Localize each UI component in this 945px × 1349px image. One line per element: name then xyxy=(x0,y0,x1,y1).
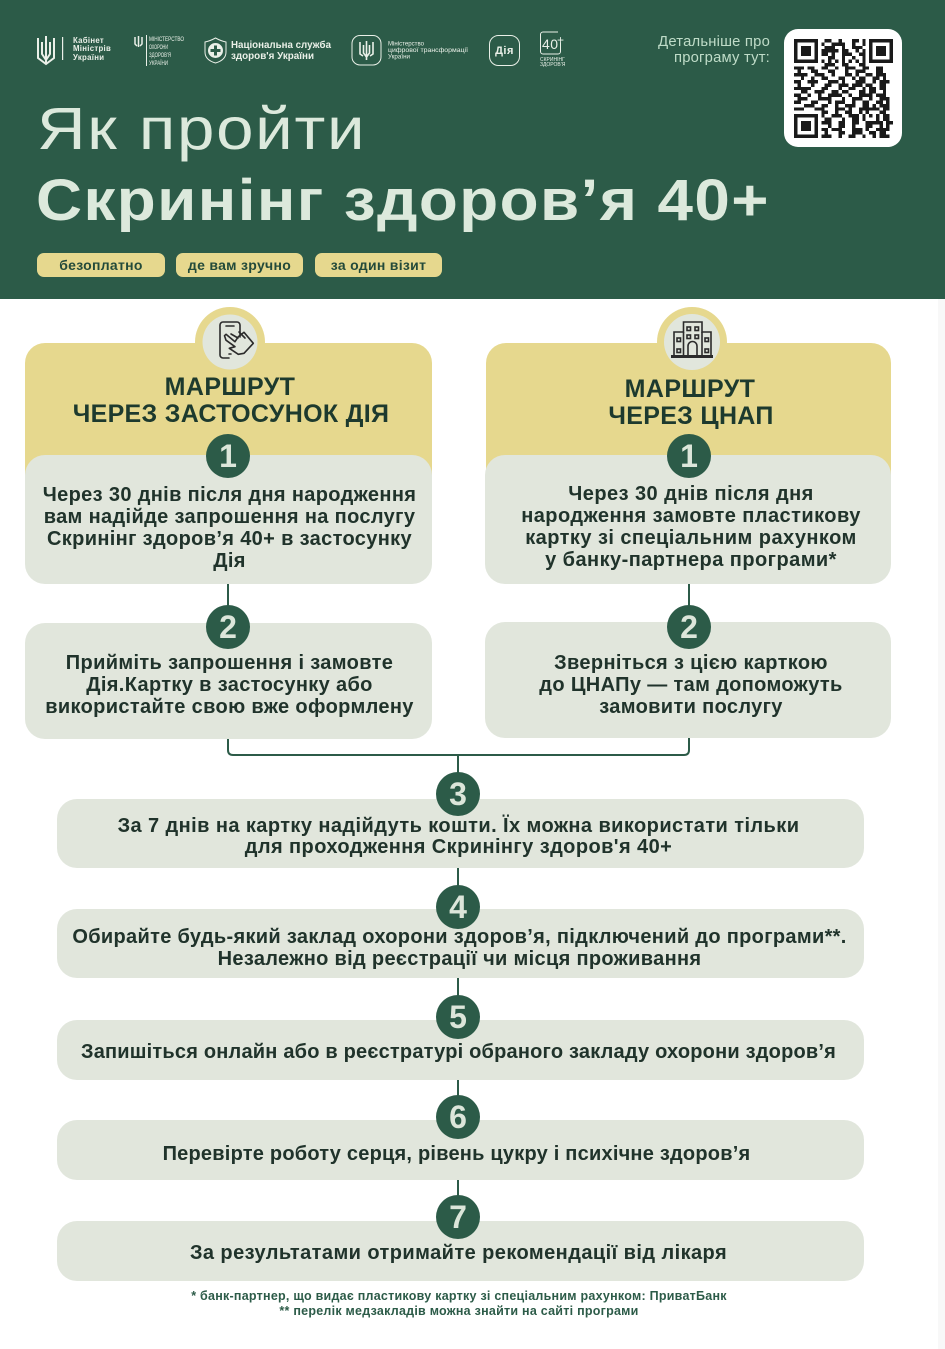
step 4 text: Обирайте будь-який заклад охорони здоров’я, підключений до програми**. xyxy=(72,926,847,948)
step text: вам надійде запрошення на послугу xyxy=(44,506,415,528)
step text xyxy=(45,652,414,718)
title bold line: Скринінг здоров’я 40+ xyxy=(36,168,770,233)
badge 3: 3 xyxy=(449,776,467,812)
logo: Ministry of Digital Transformation: України xyxy=(388,54,410,60)
footnotes: ** перелік медзакладів можна знайти на сайті програми xyxy=(279,1304,639,1318)
tag: one visit xyxy=(315,253,442,277)
step 7 text: За результатами отримайте рекомендації від лікаря xyxy=(190,1242,727,1264)
logo: Ministry of Digital Transformation: цифрової трансформації xyxy=(388,48,468,54)
step 3 card xyxy=(57,799,864,868)
heading line 2: ЧЕРЕЗ ЗАСТОСУНОК ДІЯ xyxy=(73,400,389,428)
step 3 text: для проходження Скринінгу здоров'я 40+ xyxy=(245,836,672,858)
tag: convenient xyxy=(176,253,303,277)
step 4 card xyxy=(57,909,864,978)
icon: building xyxy=(657,307,727,370)
QR code xyxy=(784,29,902,147)
logo: Screening 40+: 40 xyxy=(542,36,558,52)
tag: free: безоплатно xyxy=(59,257,143,273)
step text: у банку-партнера програми* xyxy=(545,549,837,571)
heading line 2: ЧЕРЕЗ ЦНАП xyxy=(608,402,774,430)
step 5 card xyxy=(57,1020,864,1080)
step text: Через 30 днів після дня народження xyxy=(43,484,416,506)
step text: замовити послугу xyxy=(599,696,783,718)
logo row xyxy=(37,32,566,68)
logo: Ministry of Health: ЗДОРОВ'Я xyxy=(149,52,171,59)
logo: Ministry of Health: МІНІСТЕРСТВО xyxy=(149,36,184,43)
badge 7: 7 xyxy=(449,1199,467,1235)
step 7 card xyxy=(57,1221,864,1281)
logo: Cabinet of Ministers: Міністрів xyxy=(73,44,111,53)
route card yellow xyxy=(25,343,432,483)
tag: one visit: за один візит xyxy=(331,257,426,273)
logo: Screening 40+ xyxy=(540,32,566,68)
panel: route via Diia app xyxy=(25,307,432,739)
step text: до ЦНАПу — там допоможуть xyxy=(539,674,843,696)
step text: використайте свою вже оформлену xyxy=(45,696,414,718)
badge 5: 5 xyxy=(449,999,467,1035)
logo: National Health Service xyxy=(205,38,331,63)
step text xyxy=(521,483,861,571)
badge 2 left: 2 xyxy=(219,609,237,645)
step text: Через 30 днів після дня xyxy=(568,483,814,505)
badge 2 left xyxy=(206,605,250,649)
logo: Screening 40+: СКРИНІНГ xyxy=(540,57,565,63)
step 3 text xyxy=(118,814,799,858)
badge 5 xyxy=(436,995,480,1039)
step 5 text: Запишіться онлайн або в реєстратурі обраного закладу охорони здоров’я xyxy=(81,1041,836,1063)
logo: Diia: Дія xyxy=(495,45,514,57)
heading: МАРШРУТ xyxy=(625,375,755,403)
route card yellow xyxy=(486,343,891,483)
step 2 card xyxy=(25,623,432,739)
logo: Cabinet of Ministers xyxy=(38,36,111,64)
badge 7 xyxy=(436,1195,480,1239)
badge 1 right: 1 xyxy=(680,438,698,474)
badge 1 right xyxy=(667,434,711,478)
step text: Прийміть запрошення і замовте xyxy=(66,652,393,674)
step 1 card xyxy=(485,455,891,584)
badge 4: 4 xyxy=(449,889,467,925)
badge 6 xyxy=(436,1095,480,1139)
panel: route via TsNAP xyxy=(485,307,891,738)
logo: Ministry of Digital Transformation: Міністерство xyxy=(388,42,425,48)
step text: Дія xyxy=(213,550,246,572)
tag: free xyxy=(37,253,165,277)
logo: Diia xyxy=(490,36,520,66)
QR caption xyxy=(658,34,770,66)
header band xyxy=(0,0,945,299)
step 6 card xyxy=(57,1120,864,1180)
step 6 text: Перевірте роботу серця, рівень цукру і психічне здоров’я xyxy=(163,1143,750,1165)
tag: convenient: де вам зручно xyxy=(188,257,291,273)
step 3 text: За 7 днів на картку надійдуть кошти. Їх можна використати тільки xyxy=(118,815,799,837)
step text xyxy=(43,484,416,572)
heading: МАРШРУТ xyxy=(165,373,295,401)
logo: National Health Service: Національна служба xyxy=(231,39,331,51)
step 1 card xyxy=(25,455,432,584)
step text: Дія.Картку в застосунку або xyxy=(86,674,373,696)
badge 2 right: 2 xyxy=(680,609,698,645)
logo: Cabinet of Ministers: Кабінет xyxy=(73,36,104,45)
badge 4 xyxy=(436,885,480,929)
step 2 card xyxy=(485,622,891,738)
logo: Cabinet of Ministers: України xyxy=(73,53,104,62)
badge 3 xyxy=(436,772,480,816)
step text: народження замовте пластикову xyxy=(521,505,861,527)
logo: Ministry of Health: ОХОРОНИ xyxy=(149,44,168,51)
logo: Screening 40+: ЗДОРОВ'Я xyxy=(540,62,566,68)
badge 6: 6 xyxy=(449,1099,467,1135)
logo: National Health Service: здоров'я України xyxy=(231,51,314,62)
title: Як пройти xyxy=(37,96,366,162)
badge 1 left xyxy=(206,434,250,478)
step text: картку зі спеціальним рахунком xyxy=(525,527,857,549)
step 4 text xyxy=(72,926,847,970)
step 4 text: Незалежно від реєстрації чи місця проживання xyxy=(218,948,701,970)
footnotes: * банк-партнер, що видає пластикову картку зі спеціальним рахунком: ПриватБанк xyxy=(191,1289,727,1303)
step text xyxy=(539,652,843,718)
badge 1 left: 1 xyxy=(219,438,237,474)
QR caption: програму тут: xyxy=(674,50,770,66)
QR caption: Детальніше про xyxy=(658,34,770,50)
logo: Ministry of Digital Transformation xyxy=(352,36,468,65)
footnotes xyxy=(191,1289,727,1318)
step text: Зверніться з цією карткою xyxy=(554,652,828,674)
logo: Ministry of Health: УКРАЇНИ xyxy=(149,59,168,67)
step text: Скринінг здоров’я 40+ в застосунку xyxy=(47,528,412,550)
badge 2 right xyxy=(667,605,711,649)
logo: Ministry of Health xyxy=(135,35,184,67)
icon: phone with hand xyxy=(195,307,265,370)
logo: Screening 40+: + xyxy=(557,33,564,47)
